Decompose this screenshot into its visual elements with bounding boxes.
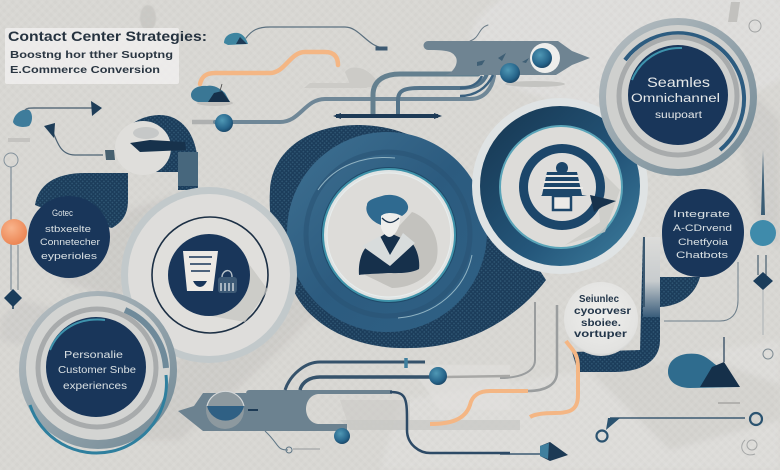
label: Customer Snbe <box>58 365 136 376</box>
halftone tail: right <box>572 237 700 372</box>
icon: document and lock <box>183 251 237 293</box>
dark arcs below banner <box>460 75 493 96</box>
label <box>631 74 720 121</box>
diamond <box>4 289 22 307</box>
badge: left connector experiences: Connetecher <box>40 237 100 248</box>
plug <box>376 47 387 50</box>
title: Contact Center Strategies: <box>8 29 207 44</box>
circle: right storefront <box>472 98 648 274</box>
circle: centre persona <box>287 132 487 332</box>
halftone blob behind centre <box>270 125 546 348</box>
ball on main pipe <box>215 114 233 132</box>
ball: bottom <box>334 428 350 444</box>
circle: bottom-left personalise <box>19 291 177 453</box>
badge: left connector experiences <box>28 196 110 278</box>
ball: bottom right of pipes <box>429 367 447 385</box>
label: Omnichannel <box>631 93 720 105</box>
badge: left connector experiences: Gotec <box>52 208 73 219</box>
badge: right chatbots: Chetfyoia <box>678 237 729 248</box>
badge: right chatbots <box>662 189 744 277</box>
label: Seamles <box>647 74 710 90</box>
subtitle line two: E.Commerce Conversion <box>10 65 160 76</box>
title box <box>5 28 207 84</box>
branch one <box>373 74 478 114</box>
left arrows <box>13 101 115 160</box>
top arrow line <box>25 108 95 110</box>
vertical stem with ball and diamond <box>1 153 27 309</box>
ring top right decoration <box>728 2 761 32</box>
orange line right <box>530 341 578 417</box>
bottom gray shape <box>178 390 392 431</box>
mound: bottom right <box>668 337 740 404</box>
halftone tail behind left badge <box>35 173 128 228</box>
branch two <box>398 74 487 114</box>
label: experiences <box>63 381 127 392</box>
badge: left connector experiences: eyperioles <box>41 251 97 262</box>
ring <box>530 43 560 73</box>
mound: top small <box>224 33 248 45</box>
subtitle line one: Boostng hor tther Suoptng <box>10 50 173 61</box>
thin curl <box>470 25 488 41</box>
button: virtual support: vortuper <box>574 329 627 340</box>
button: virtual support: sboiee. <box>581 318 621 329</box>
gray arrow banner: top <box>424 41 590 83</box>
connector pipes: bottom <box>265 358 510 453</box>
label: Personalie <box>64 350 124 361</box>
base bar <box>336 114 438 118</box>
icon: storefront <box>541 162 587 210</box>
badge: right chatbots: A-CDrvend <box>673 223 732 234</box>
orange ball <box>1 219 27 245</box>
arrow: bottom <box>500 442 568 461</box>
label: suupoart <box>655 110 702 121</box>
top arrow head <box>91 101 102 116</box>
icon: top-left half sphere <box>115 115 198 190</box>
blob <box>13 110 32 127</box>
right stem with ball and diamond <box>750 150 776 359</box>
ball <box>500 63 520 83</box>
button: virtual support <box>564 282 638 356</box>
connector pipes: top centre <box>192 25 494 122</box>
badge: right chatbots: Integrate <box>673 209 730 220</box>
marks <box>477 53 529 66</box>
lines left of button <box>430 302 578 424</box>
orange line <box>200 52 338 84</box>
icon: persona <box>359 195 419 275</box>
label <box>58 350 136 392</box>
connector: ring to ring <box>596 413 762 442</box>
circle: top-right omnichannel <box>599 18 757 176</box>
badge: right chatbots: Chatbots <box>676 250 728 261</box>
button: virtual support: cyoorvesr <box>574 306 631 317</box>
orange line <box>430 391 528 424</box>
circle: left document <box>121 187 297 363</box>
badge: left connector experiences: stbxeelte <box>45 224 91 235</box>
mound: mid <box>191 84 233 106</box>
thin connector <box>246 27 385 48</box>
lower arrow <box>53 132 103 155</box>
thin line from chatbots badge <box>664 262 738 321</box>
button: virtual support: Seiunlec <box>579 294 619 305</box>
small swirl <box>742 440 757 455</box>
main pipe <box>192 120 215 124</box>
lower arrow head <box>44 123 55 138</box>
